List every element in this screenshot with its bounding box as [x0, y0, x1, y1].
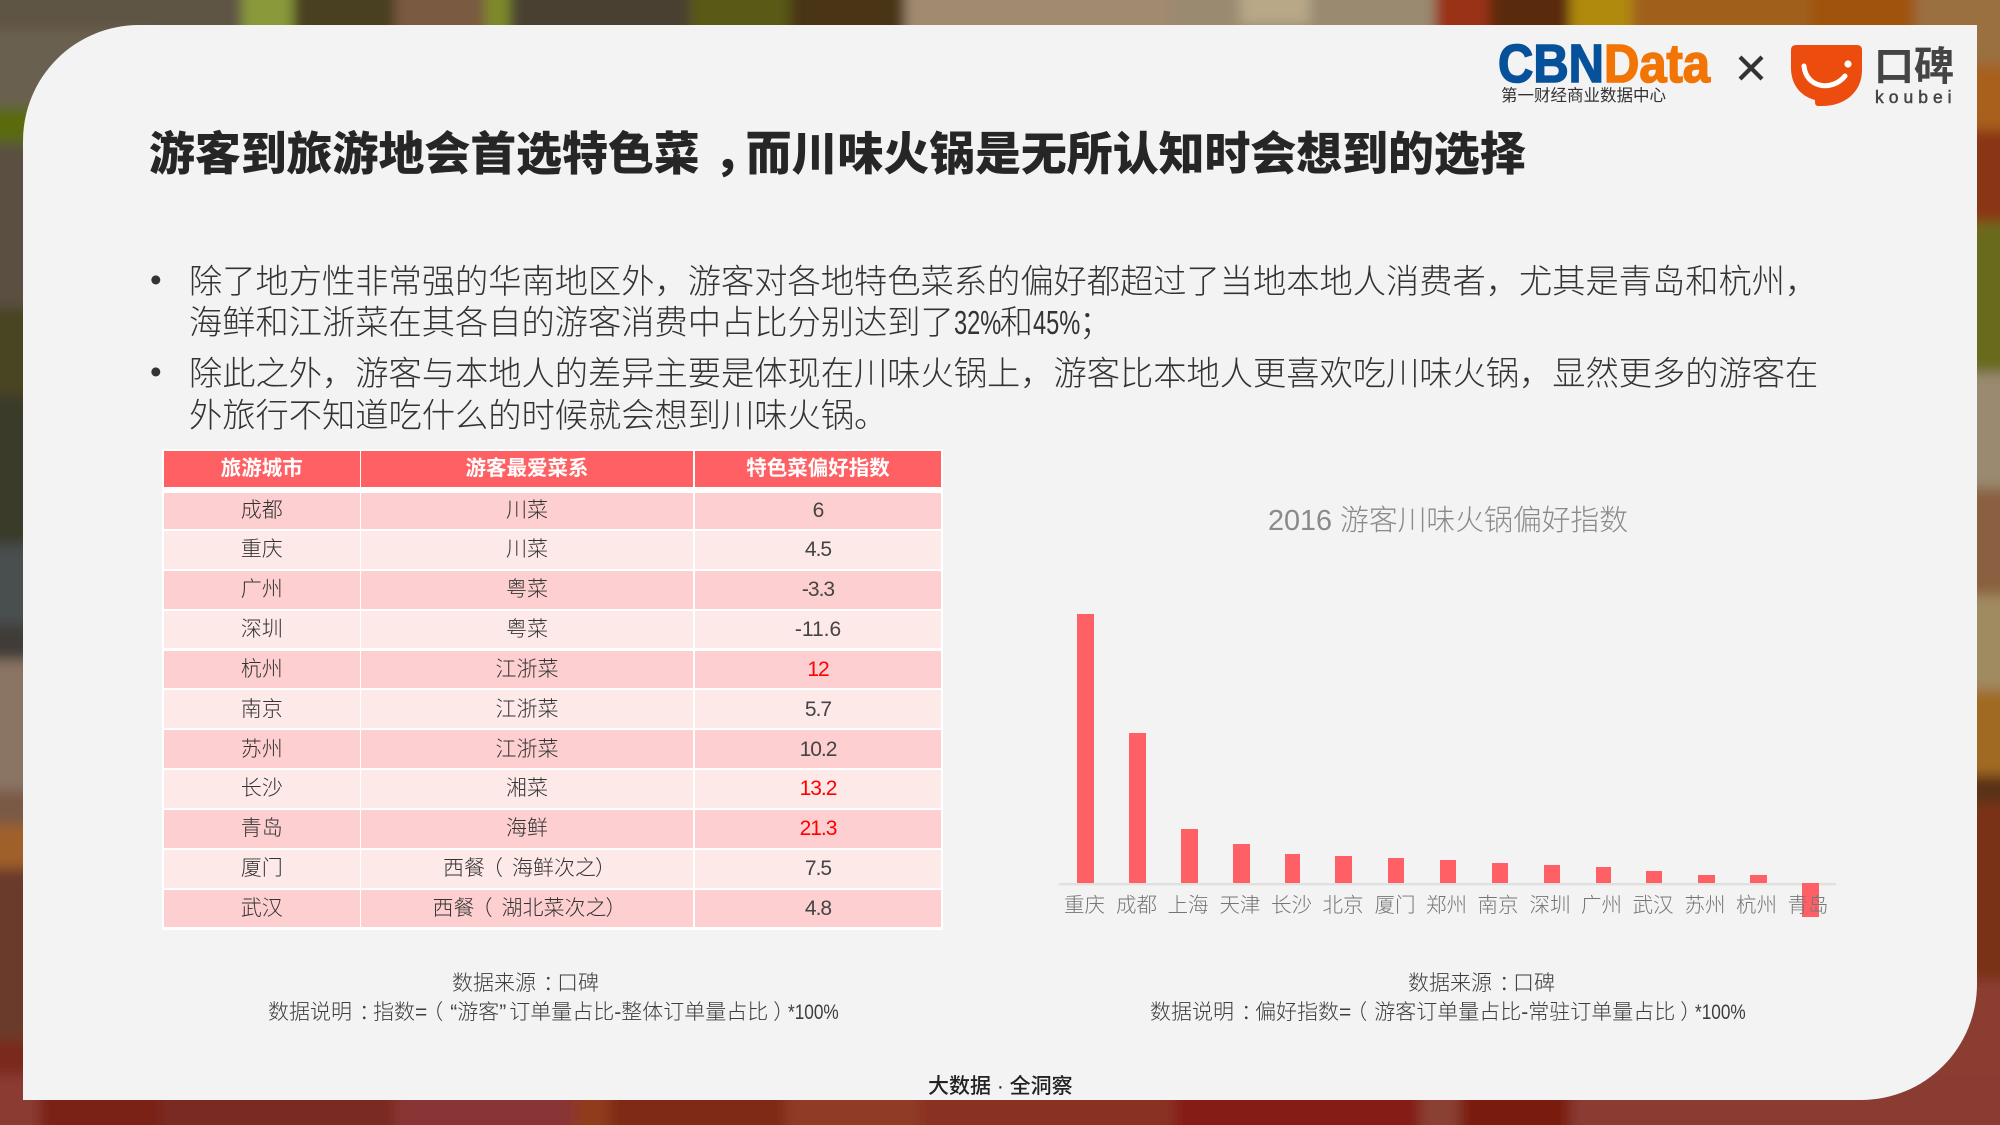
logo: CBNData: Data [1604, 35, 1711, 94]
text: 5.7 [805, 698, 831, 721]
bar chart: tourist Sichuan hotpot preference index: 北京 [1322, 894, 1364, 917]
text: 江浙菜 [496, 698, 558, 721]
logo: Koubei: 口碑 [1874, 45, 1954, 89]
table rows [164, 493, 941, 927]
bar chart: tourist Sichuan hotpot preference index: 广州 [1581, 894, 1622, 917]
text: 深圳 [241, 618, 283, 641]
source note: table: *100% [788, 1001, 839, 1024]
text: 江浙菜 [496, 738, 558, 761]
text: 4.5 [805, 538, 831, 561]
bar chart: tourist Sichuan hotpot preference index: 深圳 [1530, 894, 1570, 917]
bar chart: tourist Sichuan hotpot preference index: 成都 [1116, 894, 1157, 917]
text: 成都 [241, 499, 283, 522]
text: 粤菜 [506, 618, 548, 641]
bar chart: tourist Sichuan hotpot preference index: 厦门 [1374, 894, 1416, 917]
text: -3.3 [802, 578, 834, 601]
text: 12 [807, 658, 829, 681]
text: 武汉 [241, 897, 283, 920]
text: 苏州 [241, 738, 283, 761]
source note: chart: 数据说明 ：偏好指数=（ 游客订单量占比-常驻订单量占比 [1150, 1001, 1675, 1024]
bar chart: tourist Sichuan hotpot preference index: 苏州 [1684, 894, 1726, 917]
text: 青岛 [241, 817, 283, 840]
text: 10.2 [800, 738, 836, 761]
bullet two: 外旅行不知道吃什么的时候就会想到川味火锅。 [189, 398, 887, 435]
bullet one: 32% [954, 305, 1001, 342]
logo: Koubei: koubei [1875, 87, 1957, 107]
source note: table: 数据来源 ：口碑 [452, 972, 599, 995]
title: 游客到旅游地会首选特色菜 ，而川味火锅是无所认知时会想到的选择 [149, 128, 1526, 180]
source note: table [268, 972, 839, 1024]
logo: Koubei [1791, 45, 1957, 107]
source note: chart: 数据来源 ：口碑 [1408, 972, 1555, 995]
text: 重庆 [241, 538, 283, 561]
logo: CBNData [1498, 35, 1711, 105]
text: 13.2 [800, 777, 836, 800]
bullet one: • [150, 262, 162, 299]
text: 海鲜 [506, 817, 548, 840]
text: 川菜 [506, 499, 548, 522]
icon: times symbol [1738, 56, 1764, 80]
bullet one: 45% [1033, 305, 1080, 342]
text: 西餐（ 湖北菜次之） [432, 897, 626, 920]
text: 厦门 [241, 857, 283, 880]
text: 21.3 [800, 817, 836, 840]
text: 4.8 [805, 897, 831, 920]
text: 特色菜偏好指数 [746, 457, 890, 480]
bar chart: tourist Sichuan hotpot preference index: 杭州 [1736, 894, 1777, 917]
text: 川菜 [506, 538, 548, 561]
text: 江浙菜 [496, 658, 558, 681]
text: 南京 [241, 698, 283, 721]
text block: insights [150, 262, 1818, 435]
bullet one [150, 262, 1818, 342]
footer slogan: 大数据 · 全洞察 [928, 1075, 1073, 1098]
bullet one: 海鲜和江浙菜在其各自的游客消费中占比分别达到了 和 ； [189, 305, 1112, 342]
bar chart: tourist Sichuan hotpot preference index: 南京 [1478, 894, 1518, 917]
source note: chart: ） [1680, 1001, 1701, 1024]
bar chart: tourist Sichuan hotpot preference index: 上海 [1168, 894, 1208, 917]
bar chart: tourist Sichuan hotpot preference index: 长沙 [1271, 894, 1312, 917]
text: -11.6 [795, 618, 841, 641]
text: 西餐（ 海鲜次之） [443, 857, 616, 880]
text: 广州 [241, 578, 283, 601]
bar chart: tourist Sichuan hotpot preference index: 郑州 [1426, 894, 1467, 917]
source note: table: ） [773, 1001, 794, 1024]
text: 游客最爱菜系 [466, 457, 588, 480]
text: 长沙 [241, 777, 283, 800]
bullet two: 除此之外，游客与本地人的差异主要是体现在川味火锅上，游客比本地人更喜欢吃川味火锅，显然更多的游客在 [189, 356, 1818, 393]
text: 杭州 [241, 658, 283, 681]
bar chart: tourist Sichuan hotpot preference index: 重庆 [1064, 894, 1105, 917]
source note: chart: *100% [1695, 1001, 1746, 1024]
bullet one: 除了地方性非常强的华南地区外，游客对各地特色菜系的偏好都超过了当地本地人消费者，尤其是青岛和杭州， [189, 264, 1818, 301]
text: 7.5 [805, 857, 831, 880]
text: 湘菜 [506, 777, 548, 800]
text: 旅游城市 [221, 457, 303, 480]
bullet two [150, 354, 1818, 435]
bar chart: tourist Sichuan hotpot preference index: 天津 [1220, 894, 1260, 917]
bullet two: • [150, 354, 162, 391]
logo: CBNData: 第一财经商业数据中心 [1501, 86, 1666, 105]
table: tourist favourite cuisines [162, 449, 943, 930]
bar chart: tourist Sichuan hotpot preference index [1059, 614, 1836, 917]
table header [164, 451, 941, 487]
source note: chart [1150, 972, 1746, 1024]
source note: table: 数据说明 ：指数=（ “游客”订单量占比-整体订单量占比 [268, 1001, 768, 1024]
logo: CBNData: CBN [1498, 35, 1604, 94]
text: 粤菜 [506, 578, 548, 601]
chart title: 2016 游客川味火锅偏好指数 [1268, 505, 1628, 537]
bar chart: tourist Sichuan hotpot preference index: 武汉 [1632, 894, 1674, 917]
text: 6 [813, 499, 823, 522]
bar chart: tourist Sichuan hotpot preference index: 青岛 [1788, 894, 1828, 917]
